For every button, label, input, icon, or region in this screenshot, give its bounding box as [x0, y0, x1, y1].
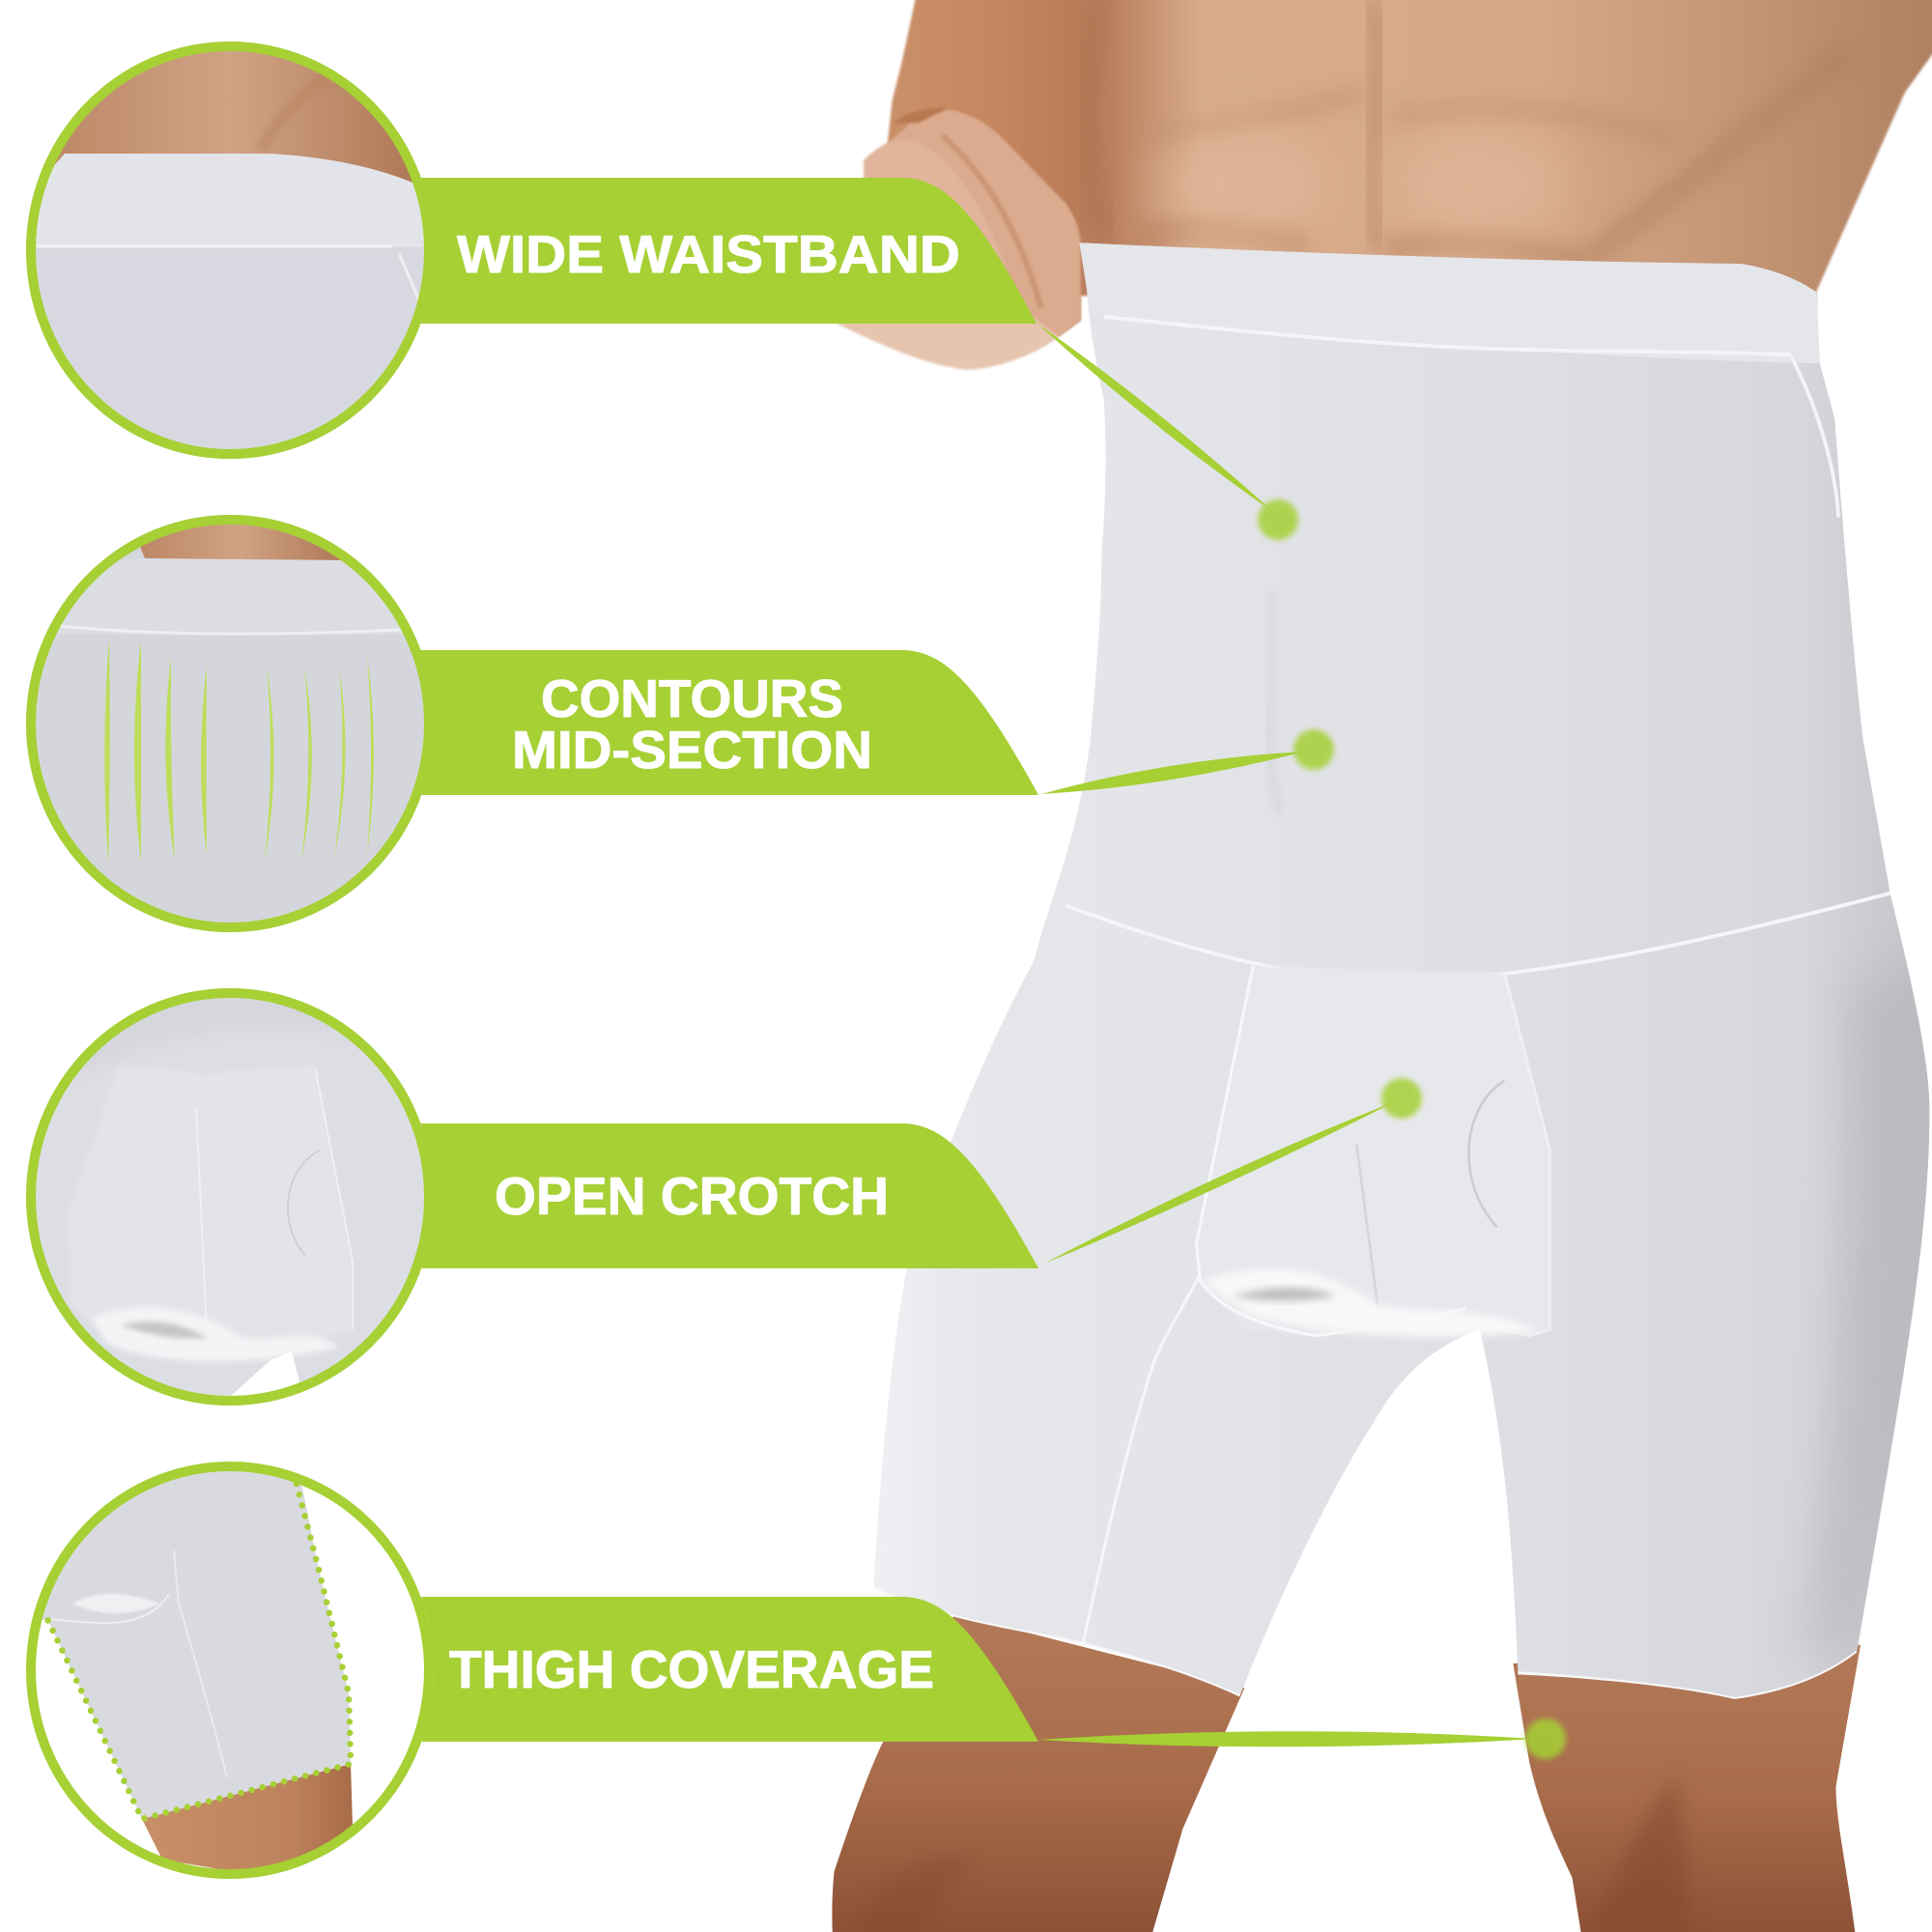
contour stripes — [104, 638, 207, 863]
legs — [832, 1614, 1861, 1932]
dotted thigh outline — [47, 1484, 351, 1819]
pointer: thigh needle and dot — [1038, 1719, 1566, 1759]
callout banner: contours mid-section — [406, 650, 1038, 795]
hand gripping waistband — [836, 108, 1081, 370]
callout banner: thigh coverage: THIGH COVERAGE — [449, 1639, 934, 1699]
callout banner: open crotch: OPEN CROTCH — [495, 1166, 889, 1226]
detail circle: open crotch — [26, 988, 434, 1406]
torso and arm skin — [887, 0, 1932, 345]
callout banner: contours mid-section: CONTOURS — [541, 668, 843, 728]
detail circle: wide waistband — [19, 39, 444, 464]
pointer: waistband needle and dot — [1037, 324, 1298, 540]
pointer: crotch needle and dot — [1044, 1078, 1422, 1264]
shorts body — [873, 242, 1929, 1699]
detail circle: thigh coverage with dotted outline — [26, 1459, 434, 1879]
callout banner: open crotch — [406, 1123, 1038, 1268]
shorts shading and seams — [873, 242, 1932, 1699]
pointer: mid-section needle and dot — [1041, 729, 1334, 794]
callout banner: wide waistband: WIDE WAISTBAND — [457, 224, 960, 284]
model photo: man wearing white high-waist shapewear shorts — [832, 0, 1932, 1932]
callout banner: wide waistband — [406, 178, 1037, 324]
callout banner: contours mid-section: MID-SECTION — [512, 720, 872, 780]
detail circle: contours mid-section with stripes — [26, 512, 434, 932]
callout banner: thigh coverage — [406, 1597, 1038, 1742]
